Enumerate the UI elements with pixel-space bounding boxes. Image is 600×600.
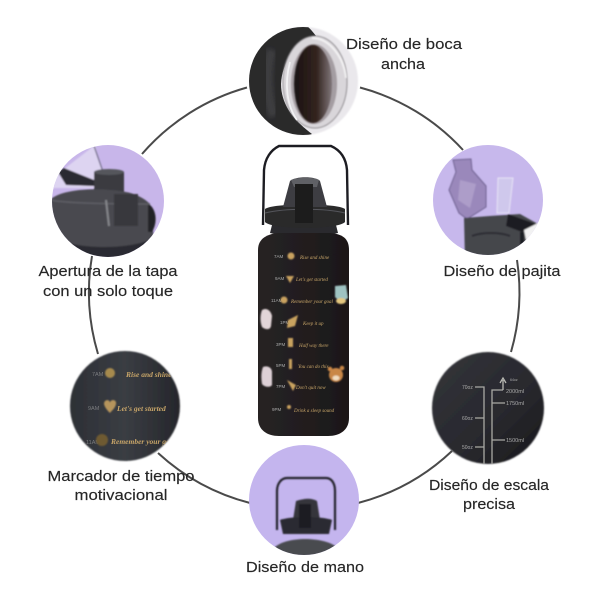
- motivational labels on the bottle: Half way there: [298, 344, 329, 349]
- label: carry handle: Diseño de mano: [246, 559, 364, 576]
- label: one-touch lid opening: Apertura de la tapa: [38, 263, 178, 280]
- motivational labels on the bottle: 11AM: [271, 298, 283, 303]
- photo: precise scale: 1750ml: [506, 401, 524, 407]
- bottle neck and cap: [270, 225, 338, 236]
- ring connecting the features: [89, 88, 519, 503]
- photo: precise scale: 70oz: [462, 385, 473, 391]
- label: precise scale: [429, 477, 550, 513]
- label: motivational time marker: [48, 468, 194, 504]
- label: one-touch lid opening: [38, 263, 178, 300]
- bottle body: [258, 233, 349, 436]
- motivational labels on the bottle: 7PM: [276, 384, 286, 389]
- photo: precise scale: 1500ml: [506, 438, 524, 444]
- photo: precise scale: [432, 352, 544, 470]
- label: motivational time marker: motivacional: [74, 487, 168, 504]
- photo: one-touch lid opening: [50, 145, 164, 260]
- motivational labels on the bottle: Let's get started: [295, 278, 328, 283]
- photo: precise scale: 60oz: [462, 416, 473, 422]
- label: straw design: Diseño de pajita: [444, 263, 561, 280]
- photo: precise scale: 2000ml: [506, 389, 524, 395]
- motivational labels on the bottle: 9AM: [275, 276, 285, 281]
- label: motivational time marker: Marcador de tiempo: [48, 468, 194, 485]
- motivational labels on the bottle: Drink a sleep sound: [293, 409, 335, 414]
- photo: motivational time marker: 7AM: [92, 372, 104, 378]
- photo: motivational time marker: 11AM: [86, 440, 100, 446]
- motivational labels on the bottle: Rise and shine: [299, 256, 330, 261]
- label: wide mouth design: ancha: [381, 56, 426, 73]
- label: one-touch lid opening: con un solo toque: [43, 283, 173, 300]
- photo: motivational time marker: 9AM: [88, 406, 100, 412]
- stickers: [260, 285, 348, 387]
- motivational labels on the bottle: 3PM: [276, 342, 286, 347]
- motivational labels on the bottle: 5PM: [276, 363, 286, 368]
- motivational labels on the bottle: You can do this: [298, 365, 329, 370]
- photo: motivational time marker: [70, 351, 180, 461]
- photo: motivational time marker: Let's get started: [116, 404, 166, 413]
- photo: precise scale: 64oz: [510, 378, 518, 382]
- photo: straw design: [433, 145, 545, 260]
- motivational labels on the bottle: Keep it up: [302, 322, 324, 327]
- motivational labels on the bottle: Don't quit now: [295, 386, 326, 391]
- bottle handle: [263, 146, 348, 225]
- photo: motivational time marker: Remember your goal: [110, 437, 176, 446]
- photo: precise scale: 50oz: [462, 445, 473, 451]
- label: precise scale: Diseño de escala: [429, 477, 550, 494]
- motivational labels on the bottle: Remember your goal: [290, 300, 334, 305]
- motivational labels on the bottle: 1PM: [280, 320, 290, 325]
- label: wide mouth design: Diseño de boca: [346, 36, 463, 53]
- motivational labels on the bottle: [271, 252, 335, 414]
- label: wide mouth design: [346, 36, 463, 73]
- photo: motivational time marker: Rise and shine: [125, 370, 172, 379]
- motivational labels on the bottle: 7AM: [274, 254, 284, 259]
- motivational labels on the bottle: 9PM: [272, 407, 282, 412]
- photo: carry handle: [249, 445, 359, 560]
- photo: wide mouth lid: [249, 27, 358, 135]
- bottle product photo: [258, 146, 349, 436]
- label: precise scale: precisa: [463, 496, 516, 513]
